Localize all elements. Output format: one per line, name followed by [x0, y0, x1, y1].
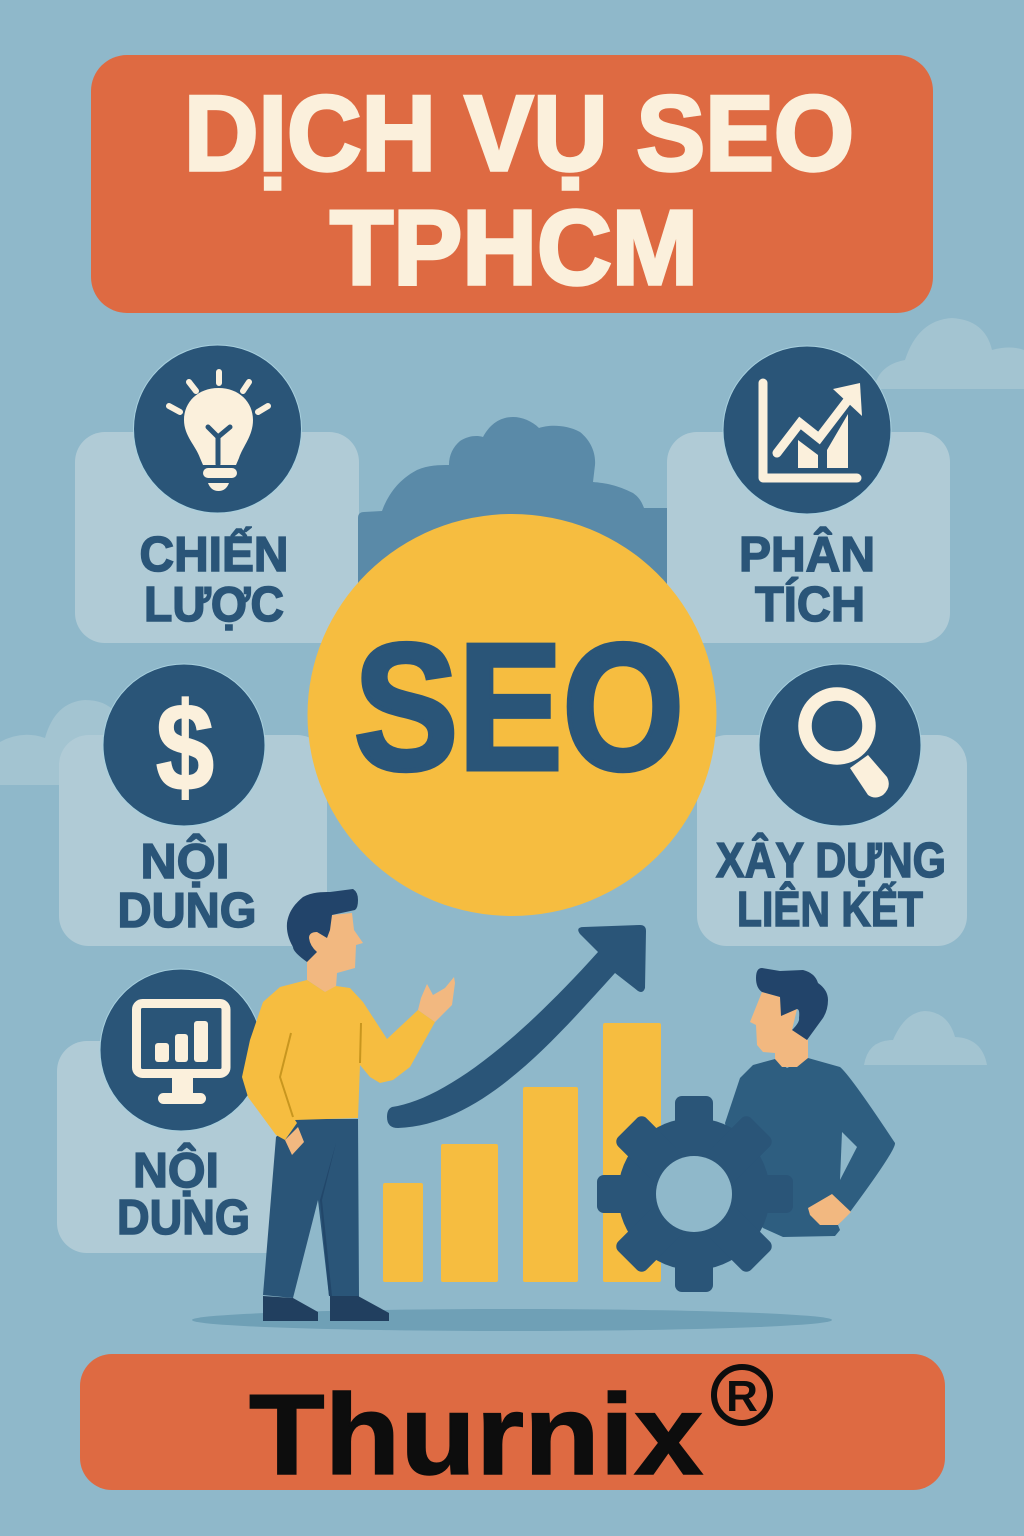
- label: nội dung top: [118, 834, 256, 938]
- sweater: [242, 980, 435, 1140]
- icon: gear: [597, 1096, 793, 1292]
- ground shadow: [192, 1309, 832, 1331]
- growth arrow: [387, 925, 646, 1128]
- label: xây dựng liên kết: [716, 833, 946, 937]
- title text: [184, 73, 854, 307]
- icon: monitor: [100, 969, 262, 1131]
- neck and face: [300, 913, 363, 992]
- label: nội dung top: DUNG: [118, 884, 256, 938]
- hair: [756, 968, 828, 1040]
- person: left man: [242, 889, 455, 1321]
- icon: light bulb: [134, 345, 302, 513]
- registered mark: R: [726, 1372, 758, 1421]
- bottom banner: [80, 1354, 945, 1499]
- person: right man: [725, 968, 895, 1237]
- registered mark: [714, 1367, 770, 1423]
- label: chiến lược: [140, 528, 288, 632]
- face and neck: [750, 992, 808, 1067]
- label: xây dựng liên kết: LIÊN KẾT: [737, 882, 923, 937]
- sweater: [725, 1058, 895, 1237]
- panel: chiến lược: [75, 345, 359, 643]
- label: xây dựng liên kết: XÂY DỰNG: [716, 833, 946, 888]
- title text: DỊCH VỤ SEO: [184, 73, 854, 193]
- label: chiến lược: CHIẾN: [140, 528, 288, 582]
- icon: magnifier: [759, 664, 921, 826]
- cloud: right lower: [864, 1011, 987, 1065]
- icon: dollar: $: [156, 679, 214, 817]
- label: phân tích: PHÂN: [739, 527, 875, 582]
- title text: TPHCM: [330, 189, 698, 307]
- label: nội dung top: NỘI: [140, 834, 230, 889]
- brand name: Thurnix: [249, 1372, 703, 1499]
- cloud behind SEO circle: [358, 417, 667, 640]
- panel: nội dung bottom: [57, 969, 307, 1253]
- SEO text: SEO: [354, 607, 684, 808]
- SEO circle: [308, 514, 716, 916]
- bar chart: [383, 1023, 661, 1282]
- label: phân tích: TÍCH: [755, 578, 865, 632]
- cloud: top right: [874, 318, 1024, 389]
- label: nội dung bottom: DUNG: [117, 1191, 250, 1245]
- icon: dollar: [103, 664, 265, 826]
- label: phân tích: [739, 527, 875, 632]
- legs: [263, 1119, 359, 1298]
- panel: nội dung top: [59, 664, 327, 946]
- panel: phân tích: [667, 346, 950, 643]
- label: chiến lược: LƯỢC: [144, 578, 284, 632]
- icon: growth chart: [723, 346, 891, 514]
- label: nội dung bottom: [117, 1143, 250, 1245]
- hands: [285, 977, 455, 1155]
- label: nội dung bottom: NỘI: [133, 1143, 219, 1198]
- cloud: left: [0, 700, 115, 785]
- hair: [287, 889, 358, 962]
- shoes: [263, 1296, 389, 1321]
- panel: xây dựng liên kết: [697, 664, 967, 946]
- title banner: [91, 55, 933, 313]
- hand: [808, 1194, 851, 1225]
